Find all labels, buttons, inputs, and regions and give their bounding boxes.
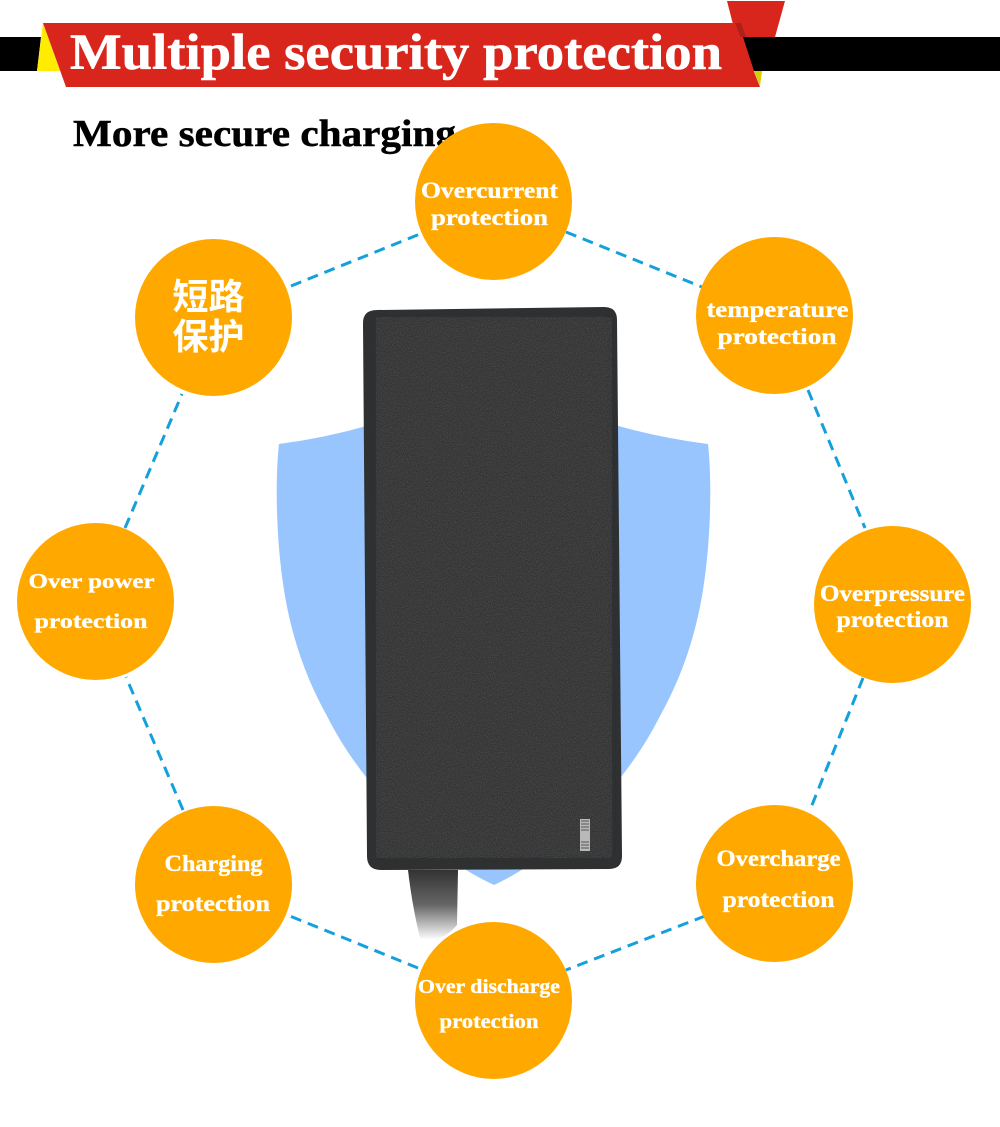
node: overcurrent <box>415 123 572 280</box>
dashed connector ring <box>125 232 865 970</box>
node: overpressure <box>814 526 971 683</box>
label strip <box>580 819 590 851</box>
yellow fold left <box>37 23 60 71</box>
node: charging <box>135 806 292 963</box>
node: over power <box>17 523 174 680</box>
yellow fold right <box>754 71 762 86</box>
node: overcharge: Overcharge <box>716 846 840 871</box>
tail fold shadow <box>733 23 746 37</box>
node: charging: Charging <box>164 851 263 876</box>
red ribbon tail <box>727 1 785 71</box>
node: over discharge: protection <box>440 1011 538 1033</box>
node: over power: Over power <box>28 569 154 593</box>
red ribbon <box>43 23 760 87</box>
node: overcharge: protection <box>722 887 835 912</box>
node: short circuit: 短路 <box>172 276 245 317</box>
header banner <box>0 1 1000 87</box>
node: charging: protection <box>156 891 270 916</box>
black band <box>0 37 1000 71</box>
power adapter <box>363 307 622 940</box>
node: overcharge <box>696 805 853 962</box>
node: temperature: protection <box>718 324 837 349</box>
node: over discharge: Over discharge <box>418 976 560 998</box>
node: short circuit <box>135 239 292 396</box>
textured face <box>376 317 612 858</box>
adapter body <box>363 307 622 870</box>
subtitle: More secure charging <box>73 113 456 155</box>
node: temperature: temperature <box>706 297 848 322</box>
node: overcurrent: Overcurrent <box>421 178 558 203</box>
node: over power: protection <box>34 609 148 633</box>
node: over discharge <box>415 922 572 1079</box>
node: overpressure: protection <box>836 607 949 632</box>
node: short circuit: 保护 <box>172 316 245 357</box>
node: overpressure: Overpressure <box>820 581 965 606</box>
node: overcurrent: protection <box>431 205 548 230</box>
shield <box>277 425 710 885</box>
cable <box>408 870 458 940</box>
title: Multiple security protection <box>70 25 722 81</box>
node: temperature <box>696 237 853 394</box>
